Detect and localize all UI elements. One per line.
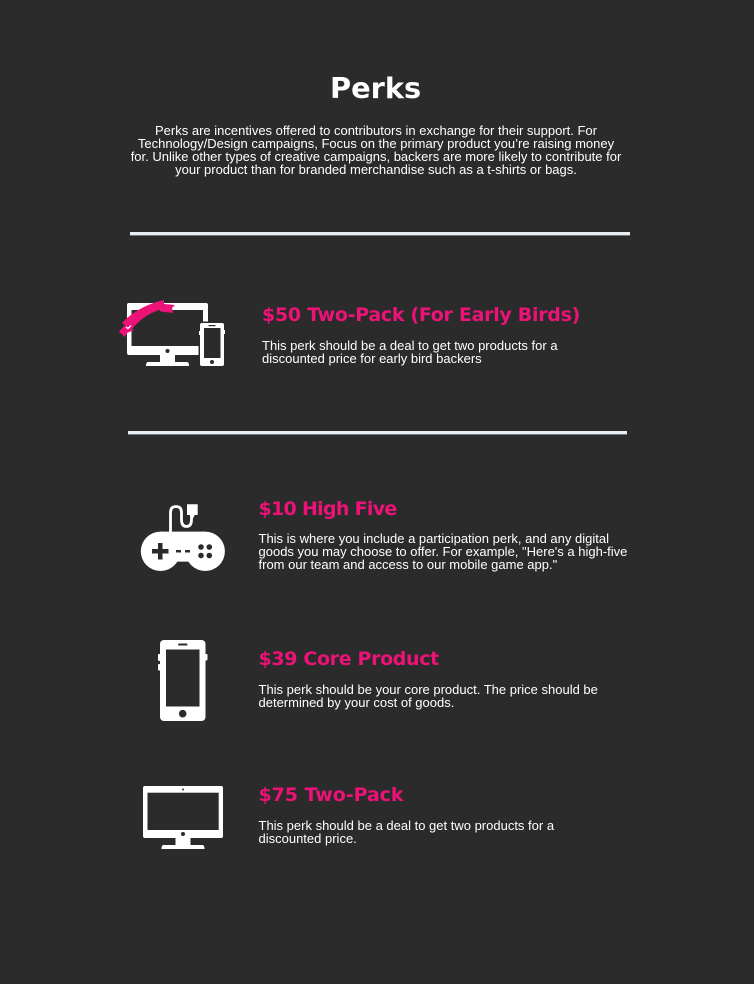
intro text: your product than for branded merchandise such as a t-shirts or bags.	[175, 162, 577, 177]
text: high five perk: goods you may choose to offer. For example, "Here's a high-five	[258, 544, 627, 559]
heading: high five perk: $10 High Five	[258, 498, 397, 520]
icon: desktop monitor	[143, 786, 223, 849]
heading: core product perk: $39 Core Product	[258, 648, 439, 670]
text: high five perk: from our team and access to our mobile game app."	[258, 557, 557, 572]
text: early bird perk: This perk should be a deal to get two products for a	[262, 338, 558, 353]
icon: game controller	[140, 504, 225, 571]
icon: devices with early bird ribbon	[119, 300, 225, 366]
intro text	[130, 123, 622, 177]
text: two-pack perk	[258, 818, 554, 846]
title: Perks	[330, 71, 421, 105]
text: core product perk: determined by your cost of goods.	[258, 695, 454, 710]
heading: two-pack perk: $75 Two-Pack	[258, 784, 403, 806]
text: core product perk	[258, 682, 598, 710]
text: core product perk: This perk should be your core product. The price should be	[258, 682, 598, 697]
intro text: Technology/Design campaigns, Focus on the primary product you’re raising money	[138, 136, 614, 151]
heading: early bird perk: $50 Two-Pack (For Early Birds)	[262, 304, 580, 326]
text: high five perk: This is where you include a participation perk, and any digital	[258, 531, 609, 546]
text: high five perk	[258, 531, 627, 572]
text: two-pack perk: This perk should be a deal to get two products for a	[258, 818, 554, 833]
icon: smartphone	[158, 640, 208, 721]
intro text: Perks are incentives offered to contributors in exchange for their support. For	[155, 123, 597, 138]
text: early bird perk: discounted price for early bird backers	[262, 351, 482, 366]
text: two-pack perk: discounted price.	[258, 831, 357, 846]
text: early bird perk	[262, 338, 558, 366]
intro text: for. Unlike other types of creative campaigns, backers are more likely to contribute for	[131, 149, 621, 164]
